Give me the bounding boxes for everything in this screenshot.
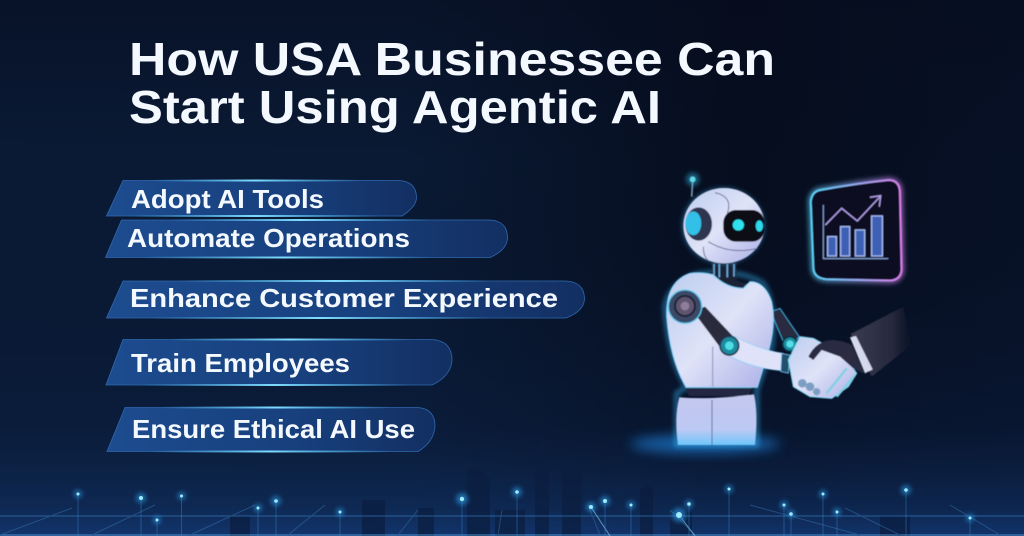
step pill: Train Employees xyxy=(106,338,452,386)
list of steps xyxy=(106,180,584,452)
step pill: Automate Operations: Automate Operations xyxy=(127,223,410,253)
robot neck xyxy=(700,263,748,291)
robot lower body xyxy=(676,394,756,445)
skyline towers xyxy=(230,432,910,536)
human sleeve xyxy=(851,307,912,377)
step pill: Enhance Customer Experience: Enhance Customer Experience xyxy=(130,283,558,313)
robot hand xyxy=(788,337,857,398)
handshake xyxy=(788,307,912,398)
title: How USA Businessee Can xyxy=(129,33,775,85)
grid lines xyxy=(0,505,1024,535)
floor glow under robot xyxy=(630,435,780,453)
illustration: robot, handshake and chart (drawn in 3x units) xyxy=(665,173,912,445)
robot head xyxy=(682,173,765,264)
light points xyxy=(76,488,972,522)
robot shoulder and arm xyxy=(668,290,790,373)
chart panel xyxy=(811,180,902,281)
step pill: Adopt AI Tools xyxy=(106,180,416,217)
trend arrow xyxy=(825,196,881,225)
human hand xyxy=(808,340,864,373)
light halos xyxy=(74,485,974,524)
shirt cuff xyxy=(850,336,873,373)
vertical light stems xyxy=(78,489,970,536)
step pill: Automate Operations xyxy=(106,219,508,258)
chart bars xyxy=(828,216,882,256)
chart axes xyxy=(823,205,888,259)
step pill: Ensure Ethical AI Use: Ensure Ethical AI Use xyxy=(132,414,415,444)
step pill: Ensure Ethical AI Use xyxy=(107,406,435,452)
step pill: Enhance Customer Experience xyxy=(106,280,584,319)
step pill: Train Employees: Train Employees xyxy=(131,348,350,378)
step pill: Adopt AI Tools: Adopt AI Tools xyxy=(131,184,324,214)
robot far arm xyxy=(771,308,799,351)
robot waist xyxy=(685,388,752,396)
robot torso xyxy=(667,273,773,387)
title xyxy=(129,33,775,133)
robot halo xyxy=(665,272,773,445)
city skyline with network lights xyxy=(0,432,1024,536)
title: Start Using Agentic AI xyxy=(129,81,661,133)
